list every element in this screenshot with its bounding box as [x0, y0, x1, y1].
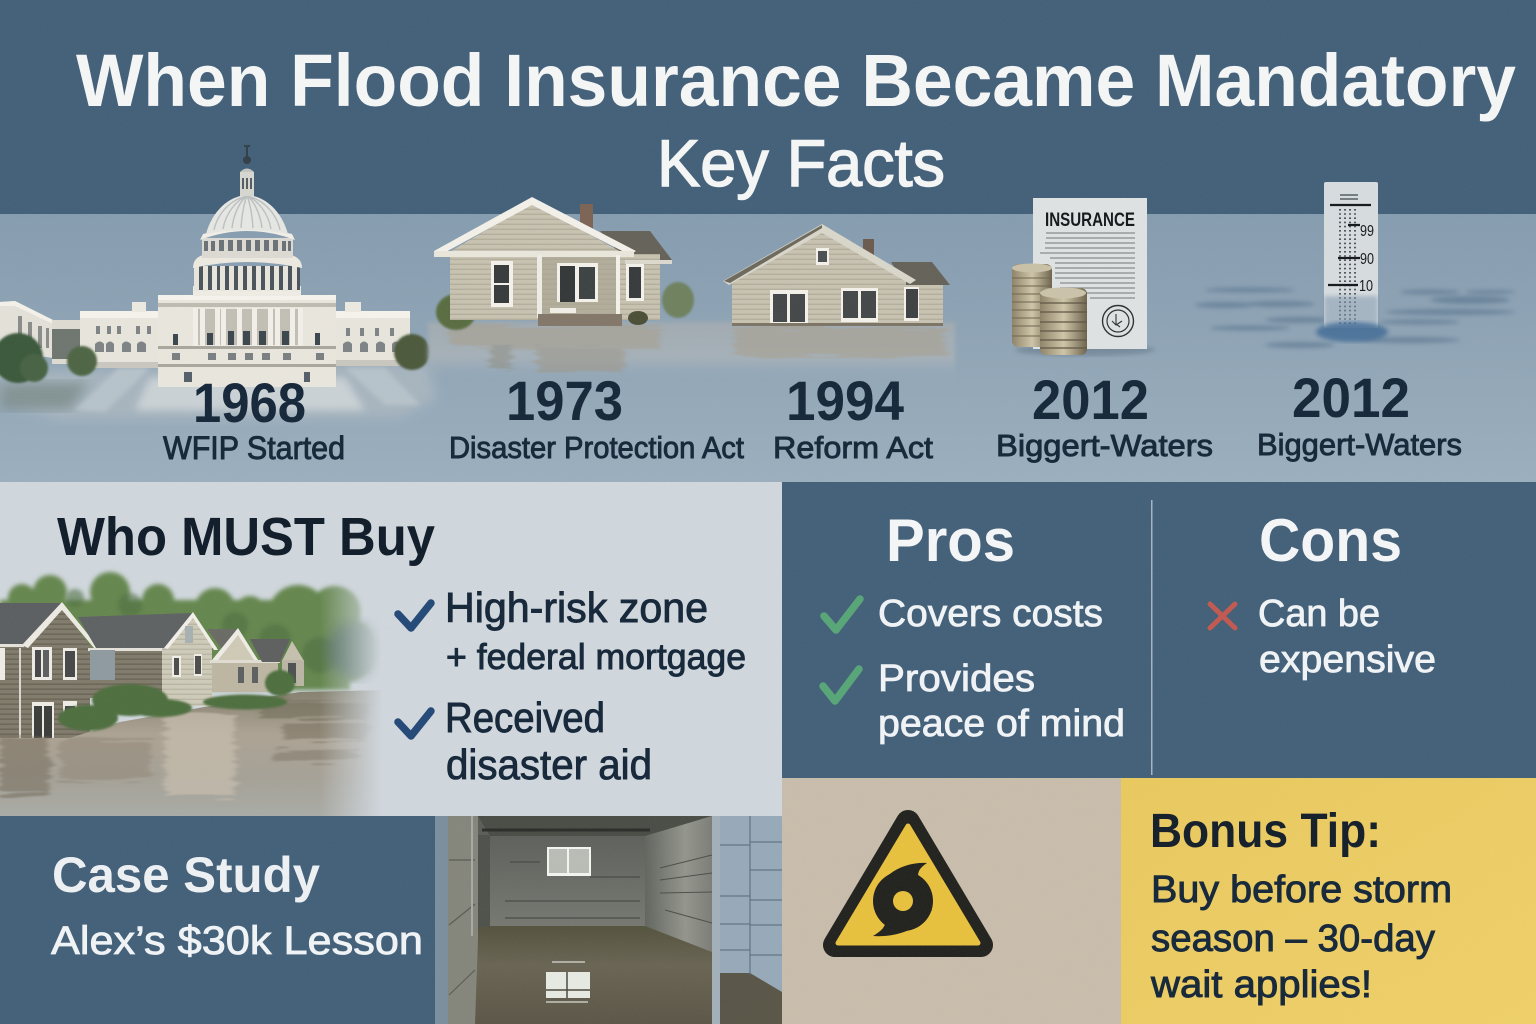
heading: pros: Pros	[886, 507, 1015, 574]
icon: flood water gauge: 10	[1359, 278, 1373, 295]
text: bonus tip body: season – 30-day	[1151, 918, 1435, 960]
year: 1968: WFIP Started	[163, 430, 345, 466]
text: bonus tip body: Buy before storm	[1151, 869, 1452, 911]
title: When Flood Insurance Became Mandatory	[76, 39, 1516, 122]
image: flooded basement	[435, 816, 782, 1024]
text: high risk zone: High-risk zone	[445, 584, 708, 631]
text: received disaster aid: disaster aid	[446, 741, 652, 788]
floor	[475, 926, 712, 1024]
heading: bonus tip: Bonus Tip:	[1150, 805, 1381, 858]
drum and dome	[193, 286, 301, 296]
reflection	[546, 972, 590, 998]
right wall	[645, 816, 712, 952]
year: 2012 second	[1257, 366, 1462, 462]
icon: check peace of mind	[823, 669, 859, 701]
bushes	[58, 670, 295, 731]
far left wing	[0, 301, 53, 358]
icon: insurance document and coins	[1012, 198, 1155, 356]
timeline band	[0, 214, 1536, 482]
blue pillar	[712, 816, 782, 1024]
ceiling	[478, 816, 712, 836]
text: provides peace of mind	[878, 658, 1125, 745]
year: 2012 second: Biggert-Waters	[1257, 427, 1462, 462]
panel: case study	[0, 816, 435, 1024]
text: provides peace of mind: Provides	[878, 658, 1035, 700]
icon: flooded house 1973	[434, 197, 694, 371]
icon: check disaster aid	[398, 711, 431, 736]
side wings	[80, 314, 160, 366]
year: 1994: Reform Act	[773, 430, 933, 465]
icon: check covers costs	[824, 599, 860, 630]
panel: who must buy	[0, 482, 782, 816]
panel: warning sign	[782, 778, 1121, 1024]
text: provides peace of mind: peace of mind	[878, 703, 1125, 745]
title: Key Facts	[657, 126, 945, 200]
year: 2012 second: 2012	[1292, 366, 1410, 429]
text: bonus tip body	[1150, 869, 1452, 1006]
heading: who must buy: Who MUST Buy	[57, 507, 435, 567]
icon: US Capitol	[0, 145, 436, 420]
year: 2012 first: Biggert-Waters	[996, 428, 1213, 463]
image: flooded neighbourhood	[0, 572, 390, 816]
icon: insurance document and coins: INSURANCE	[1045, 210, 1135, 231]
left wall	[448, 816, 478, 1024]
year: 2012 first	[996, 368, 1213, 463]
panel: case study: Case Study	[52, 847, 320, 903]
icon: flood water gauge	[1195, 182, 1515, 348]
text: can be expensive: expensive	[1259, 639, 1436, 681]
text: covers costs: Covers costs	[878, 593, 1103, 635]
icon: check high risk	[398, 603, 431, 628]
icon: hurricane warning triangle	[835, 822, 981, 945]
text: bonus tip body: wait applies!	[1150, 964, 1372, 1006]
back wall	[490, 836, 645, 926]
text: can be expensive: Can be	[1258, 593, 1380, 635]
text: can be expensive	[1258, 593, 1436, 681]
floodwater under the houses	[428, 322, 955, 382]
window	[547, 847, 591, 876]
header band	[0, 0, 1536, 214]
flood water	[0, 690, 385, 816]
icon: flood water gauge: 90	[1360, 251, 1374, 268]
icon: cross	[1210, 604, 1235, 628]
year: 1968: 1968	[193, 371, 306, 434]
central block	[158, 297, 336, 387]
year: 1994	[773, 369, 933, 465]
panel: case study: Alex’s $30k Lesson	[51, 919, 423, 963]
year: 1973: Disaster Protection Act	[449, 430, 744, 465]
year: 1994: 1994	[786, 369, 904, 432]
trees	[0, 333, 430, 383]
heading: cons: Cons	[1259, 507, 1402, 574]
year: 2012 first: 2012	[1032, 368, 1149, 431]
houses	[0, 603, 63, 646]
icon: flooded house 1994	[723, 224, 950, 356]
icon: flood water gauge: 99	[1360, 223, 1374, 240]
title	[76, 39, 1516, 200]
panel: bonus tip	[1121, 778, 1536, 1024]
year: 1968	[163, 371, 345, 466]
year: 1973	[449, 369, 744, 465]
text: received disaster aid	[445, 694, 652, 788]
text: received disaster aid: Received	[445, 694, 605, 741]
panel: pros and cons	[782, 482, 1536, 778]
text: federal mortgage: + federal mortgage	[446, 636, 746, 677]
year: 1973: 1973	[506, 369, 623, 432]
